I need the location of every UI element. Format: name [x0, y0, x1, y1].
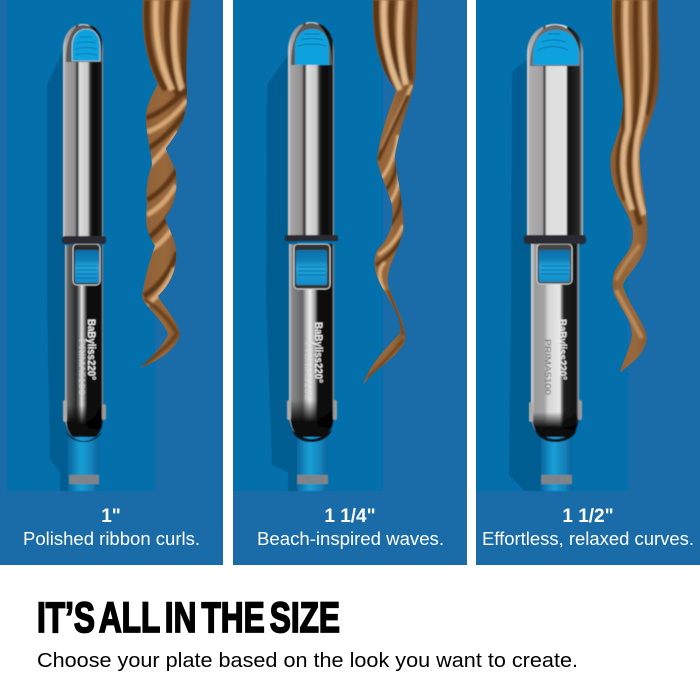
description: Effortless, relaxed curves.	[482, 529, 694, 549]
brand text	[303, 322, 324, 400]
icon: curling iron 1	[62, 24, 106, 491]
brand text: PRIMA5100	[303, 342, 313, 400]
size label: 1 1/4"	[324, 506, 376, 527]
handle	[541, 437, 572, 491]
inner backdrop	[7, 0, 155, 491]
size label: 1"	[101, 506, 121, 527]
brand text: BaByliss220°	[312, 322, 324, 383]
hair: ribbon curl	[140, 0, 191, 368]
brand text	[543, 319, 568, 395]
brand text: PRIMA5100	[77, 339, 87, 395]
panel: 1 1/2 inch	[476, 0, 700, 565]
description: Beach-inspired waves.	[257, 529, 444, 549]
curler shadow	[509, 60, 545, 491]
hair: beach wave	[363, 0, 418, 385]
title: IT’S ALL IN THE SIZE	[37, 594, 340, 642]
panel: 1 inch	[0, 0, 223, 565]
inner backdrop	[233, 0, 383, 491]
subtitle: Choose your plate based on the look you want to create.	[37, 649, 578, 672]
icon: curling iron 2	[285, 22, 338, 491]
panel: 1 1/4 inch	[233, 0, 467, 565]
icon: curling iron 3	[524, 24, 586, 491]
handle	[69, 437, 99, 491]
brand text: PRIMA5100	[543, 339, 553, 395]
curler shadow	[266, 55, 298, 491]
size label: 1 1/2"	[562, 506, 614, 527]
inner backdrop	[476, 0, 628, 491]
brand text	[77, 319, 97, 395]
hair: relaxed curve	[610, 0, 660, 373]
brand text: BaByliss220°	[556, 319, 568, 380]
description: Polished ribbon curls.	[23, 529, 200, 549]
handle	[297, 437, 328, 491]
brand text: BaByliss220°	[85, 319, 97, 380]
curler shadow	[47, 50, 68, 491]
